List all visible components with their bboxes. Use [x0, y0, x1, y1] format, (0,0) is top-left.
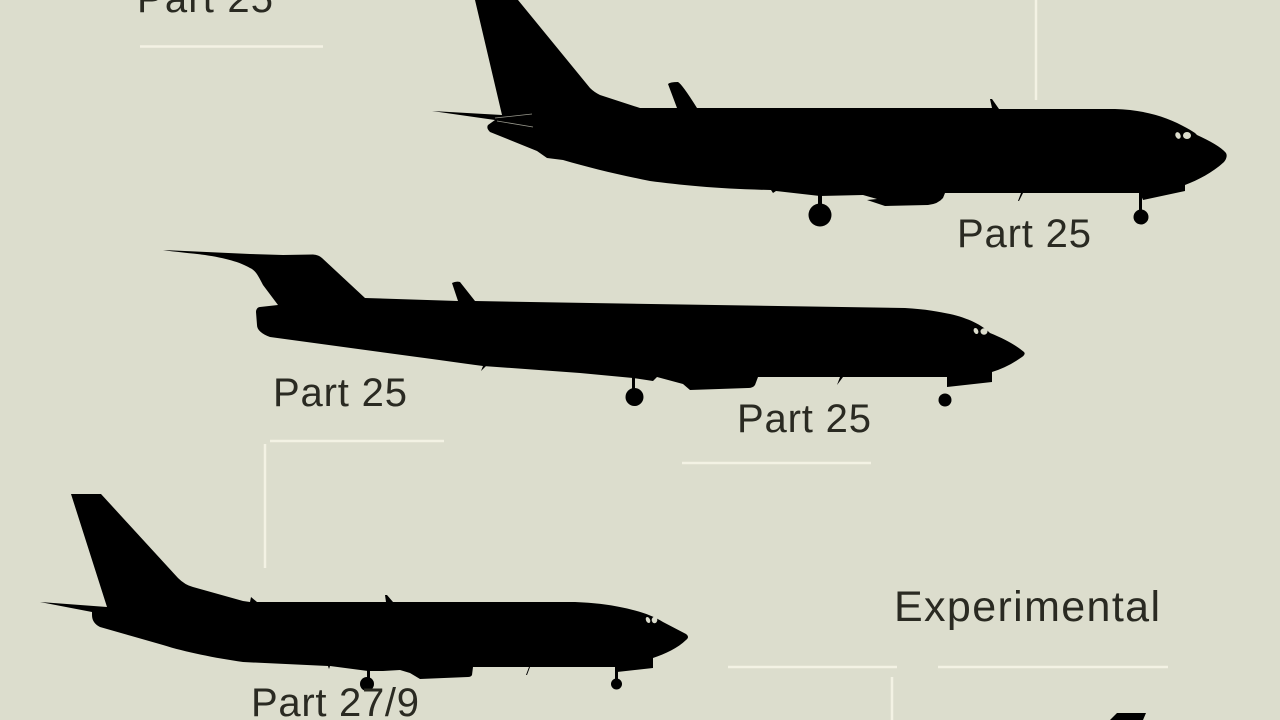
label: Experimental: Experimental	[894, 583, 1160, 631]
aircraft silhouette: lower narrow-body	[40, 494, 688, 691]
label: top airliner Part 25: Part 25	[957, 212, 1091, 256]
label: left middle Part 25: Part 25	[273, 371, 407, 415]
aircraft silhouette: middle T-tail jet	[163, 250, 1025, 406]
label: right middle Part 25: Part 25	[737, 397, 871, 441]
aircraft silhouette: cropped tail at bottom edge	[1110, 713, 1146, 720]
aircraft silhouette: top airliner	[432, 0, 1227, 226]
